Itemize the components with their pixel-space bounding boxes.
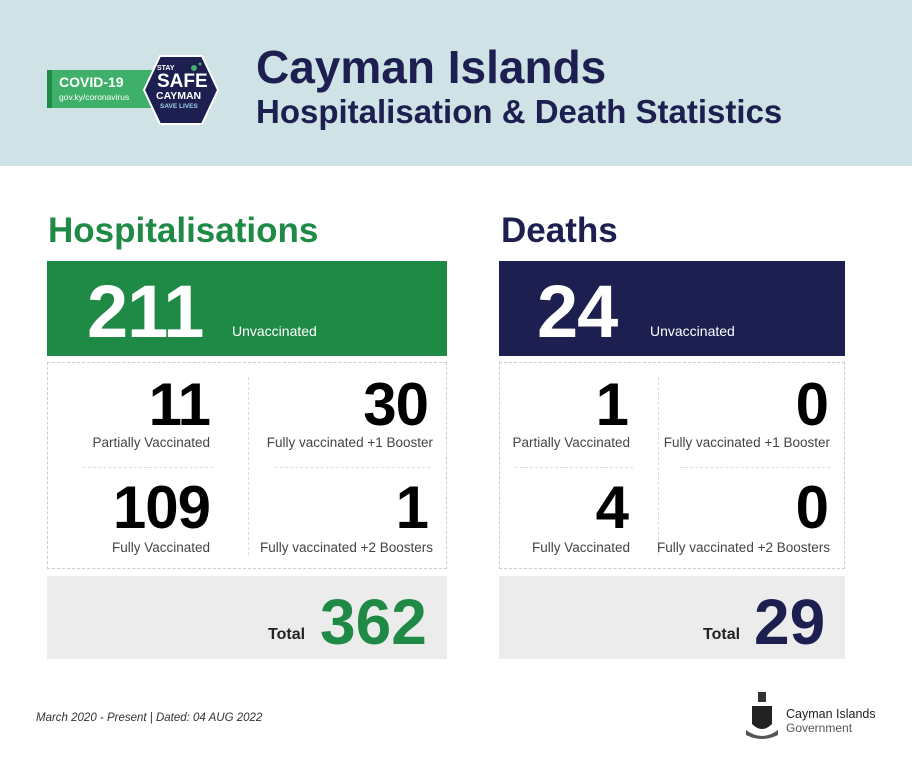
panel: deaths total: 29	[754, 586, 825, 658]
panel: hospitalisations breakdown	[47, 362, 447, 569]
logo: covid-19 badge: SAVE LIVES	[160, 103, 198, 110]
panel: hospitalisations breakdown: Partially Vaccinated	[92, 435, 210, 450]
panel: deaths breakdown: 0	[796, 474, 828, 541]
panel: deaths breakdown: 4	[596, 474, 628, 541]
panel: deaths breakdown: Fully vaccinated +1 Booster	[664, 435, 830, 450]
panel: deaths breakdown: 1	[596, 371, 628, 438]
panel: deaths breakdown	[499, 362, 845, 569]
panel: hospitalisations unvaccinated	[47, 261, 447, 356]
panel: hospitalisations breakdown: 1	[396, 474, 428, 541]
header band	[0, 0, 912, 166]
logo: covid-19 badge: gov.ky/coronavirus	[59, 92, 129, 102]
panel: hospitalisations breakdown: 30	[363, 371, 428, 438]
panel: deaths unvaccinated: 24	[537, 270, 617, 353]
panel: hospitalisations total: Total	[268, 626, 305, 643]
panel: deaths breakdown: Fully Vaccinated	[532, 540, 630, 555]
heading: Hospitalisations: Hospitalisations	[48, 211, 318, 250]
logo: covid-19 badge: CAYMAN	[156, 90, 201, 102]
footer date: March 2020 - Present | Dated: 04 AUG 2022	[36, 712, 262, 724]
panel: deaths unvaccinated	[499, 261, 845, 356]
heading: Deaths: Deaths	[501, 211, 618, 250]
panel: hospitalisations total	[47, 576, 447, 659]
logo: Cayman Islands Government: Government	[786, 721, 852, 735]
title	[256, 41, 782, 130]
panel: deaths total	[499, 576, 845, 659]
panel: hospitalisations breakdown: 109	[113, 474, 210, 541]
logo: Cayman Islands Government	[746, 692, 876, 739]
panel: hospitalisations unvaccinated: 211	[87, 270, 203, 353]
panel: hospitalisations unvaccinated: Unvaccinated	[232, 323, 317, 339]
panel: hospitalisations breakdown: Fully vaccinated +1 Booster	[267, 435, 433, 450]
panel: deaths total: Total	[703, 626, 740, 643]
panel: hospitalisations total: 362	[320, 586, 427, 658]
panel: hospitalisations breakdown: Fully vaccinated +2 Boosters	[260, 540, 433, 555]
panel: deaths breakdown: 0	[796, 371, 828, 438]
panel: hospitalisations breakdown: Fully Vaccinated	[112, 540, 210, 555]
logo: covid-19 badge: STAY	[157, 65, 175, 72]
logo: covid-19 badge: COVID-19	[59, 74, 124, 90]
logo: Cayman Islands Government: Cayman Islands	[786, 707, 876, 721]
panel: hospitalisations breakdown: 11	[149, 371, 210, 438]
panel: deaths unvaccinated: Unvaccinated	[650, 323, 735, 339]
title: Hospitalisation & Death Statistics	[256, 93, 782, 130]
panel: deaths breakdown: Partially Vaccinated	[512, 435, 630, 450]
panel: deaths breakdown: Fully vaccinated +2 Boosters	[657, 540, 830, 555]
title: Cayman Islands	[256, 41, 606, 93]
logo: covid-19 badge: SAFE	[157, 71, 208, 92]
logo: covid-19 badge	[47, 55, 219, 125]
